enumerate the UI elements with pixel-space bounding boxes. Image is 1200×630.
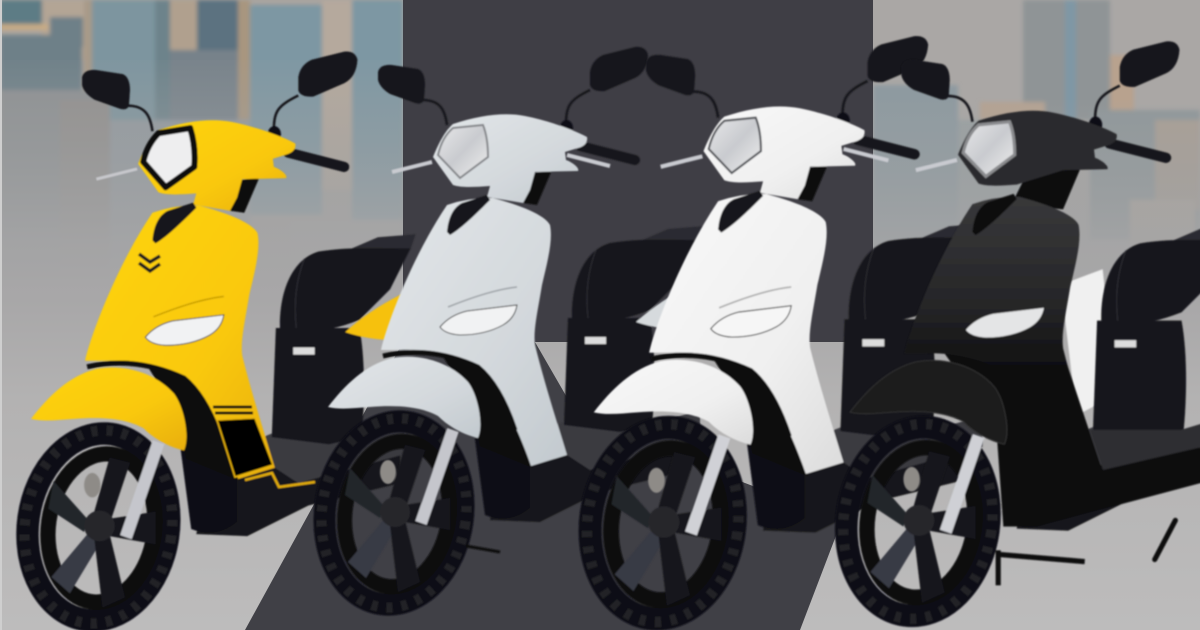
fork [691,436,724,534]
background: dark centre panel [403,0,873,342]
neck [230,177,260,213]
mirrors and grip [901,41,1179,158]
arch shadow [87,363,222,442]
background: dark floor band [245,342,842,630]
fork [946,436,979,532]
mirrors and grip [378,47,648,160]
nose vent [152,203,196,243]
headlamp [709,118,761,173]
background: city left [0,0,403,345]
scooter: white [574,36,1116,630]
fender [850,360,1007,444]
LED light [440,305,517,335]
shield crease [719,287,791,308]
shield [649,194,844,474]
shield crease [448,287,517,307]
neck [523,170,552,205]
mirrors and grip [646,36,928,154]
brake lever [96,169,137,179]
neck [798,165,828,201]
fork [126,442,159,537]
black lower panel [217,418,273,477]
rear yellow panel [345,292,405,340]
shield [85,206,275,479]
yellow trim line [245,473,315,487]
brake levers [661,149,888,167]
rear side stand [1155,520,1175,560]
shield [904,197,1096,473]
wheel [12,421,185,630]
brake levers [392,155,610,172]
nose vent [447,195,490,235]
arch shadow [383,352,515,430]
brake lever [916,160,957,170]
scooter: silver [309,47,705,617]
headlamp [438,125,488,178]
wheel [574,414,751,630]
headlamp [143,128,195,187]
underbody [945,343,1200,527]
left edge strip [0,0,2,630]
headlamp [963,122,1015,176]
scooter: black [831,41,1200,629]
side stand [466,546,500,552]
floorboard [1090,420,1200,470]
chevrons [139,254,160,271]
LED light [711,306,791,337]
LED light [965,307,1045,338]
shield crease [153,296,224,317]
scooter: yellow [12,52,416,630]
wheel [831,414,1005,629]
arch shadow [651,355,789,436]
neck [1012,168,1081,209]
stripes [213,407,253,413]
background: ground light [0,300,1200,630]
LED light [145,315,224,345]
mirrors and grip [82,52,357,167]
background: city right [873,0,1200,345]
nose vent [972,194,1017,235]
fender [594,360,753,445]
head nacelle [703,106,865,199]
head nacelle [958,111,1117,186]
head nacelle [433,114,587,203]
fork [421,430,453,523]
rear white panel [916,283,977,332]
far rear white body [1061,269,1116,415]
head nacelle [138,120,295,211]
rear silver panel [636,283,695,330]
centre stand [998,550,1085,585]
wheel [309,409,479,617]
shield [381,198,567,466]
fender [328,357,480,438]
fender [31,367,187,450]
nose vent [718,191,763,233]
